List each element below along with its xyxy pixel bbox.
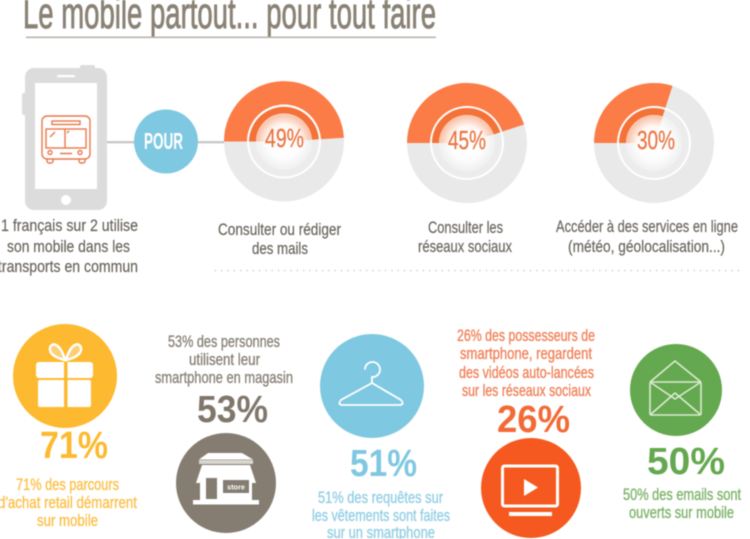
caption: transports: son mobile dans les xyxy=(7,237,130,256)
icon: phone with bus xyxy=(22,65,107,210)
caption: social networks: réseaux sociaux xyxy=(418,237,512,256)
caption: transports xyxy=(0,216,138,276)
stat: 51% clothing xyxy=(312,334,450,539)
stat: 50% emails: 50% xyxy=(647,441,725,483)
stat: 53% in store: 53% xyxy=(197,389,268,431)
caption: social networks: Consulter les xyxy=(428,218,503,237)
icon: bus xyxy=(42,116,90,163)
stat: 71% retail: d'achat retail démarrent xyxy=(0,494,137,512)
stat: 26% videos: 26% xyxy=(497,399,570,441)
donut: 30% xyxy=(594,83,714,203)
donut: 45% xyxy=(407,83,527,203)
icon: store: store xyxy=(227,484,245,492)
stat: 26% videos: 26% des possesseurs de xyxy=(457,327,595,345)
stat: 26% videos: smartphone, regardent xyxy=(460,345,592,363)
badge: POUR xyxy=(134,110,198,174)
icon: gift xyxy=(13,324,117,428)
caption: transports: 1 français sur 2 utilise xyxy=(1,216,138,235)
stat: 71% retail: 71% des parcours xyxy=(16,476,119,494)
icon: hanger xyxy=(320,334,424,438)
stat: 26% videos: des vidéos auto-lancées xyxy=(459,364,594,382)
stat: 53% in store: utilisent leur xyxy=(189,351,260,369)
stat: 51% clothing: 51% xyxy=(350,443,417,485)
donut: 30%: 30% xyxy=(637,125,675,155)
connector line xyxy=(105,141,227,143)
badge: POUR: POUR xyxy=(144,128,183,154)
icon: store xyxy=(176,433,276,533)
donut: 49%: 49% xyxy=(265,123,304,153)
stat: 26% videos: sur les réseaux sociaux xyxy=(462,382,592,400)
icon: video screen xyxy=(481,438,581,538)
stat: 51% clothing: 51% des requêtes sur xyxy=(318,489,443,507)
stat: 26% videos xyxy=(457,327,595,538)
stat: 71% retail: 71% xyxy=(40,425,108,467)
caption: online services xyxy=(556,217,738,256)
caption: social networks xyxy=(418,218,512,256)
stat: 71% retail xyxy=(0,324,137,530)
donut: 45%: 45% xyxy=(448,125,486,155)
stat: 71% retail: sur mobile xyxy=(37,512,98,530)
caption: mails: des mails xyxy=(252,239,308,258)
stat: 53% in store xyxy=(155,333,293,533)
caption: transports: transports en commun xyxy=(0,257,138,276)
icon: envelope xyxy=(630,344,722,436)
stat: 53% in store: smartphone en magasin xyxy=(155,369,293,387)
stat: 50% emails xyxy=(623,344,741,522)
stat: 53% in store: 53% des personnes xyxy=(168,333,280,351)
donut: 49% xyxy=(224,81,344,202)
caption: mails: Consulter ou rédiger xyxy=(218,220,341,239)
stat: 51% clothing: les vêtements sont faites xyxy=(312,507,450,525)
caption: mails xyxy=(218,220,341,258)
